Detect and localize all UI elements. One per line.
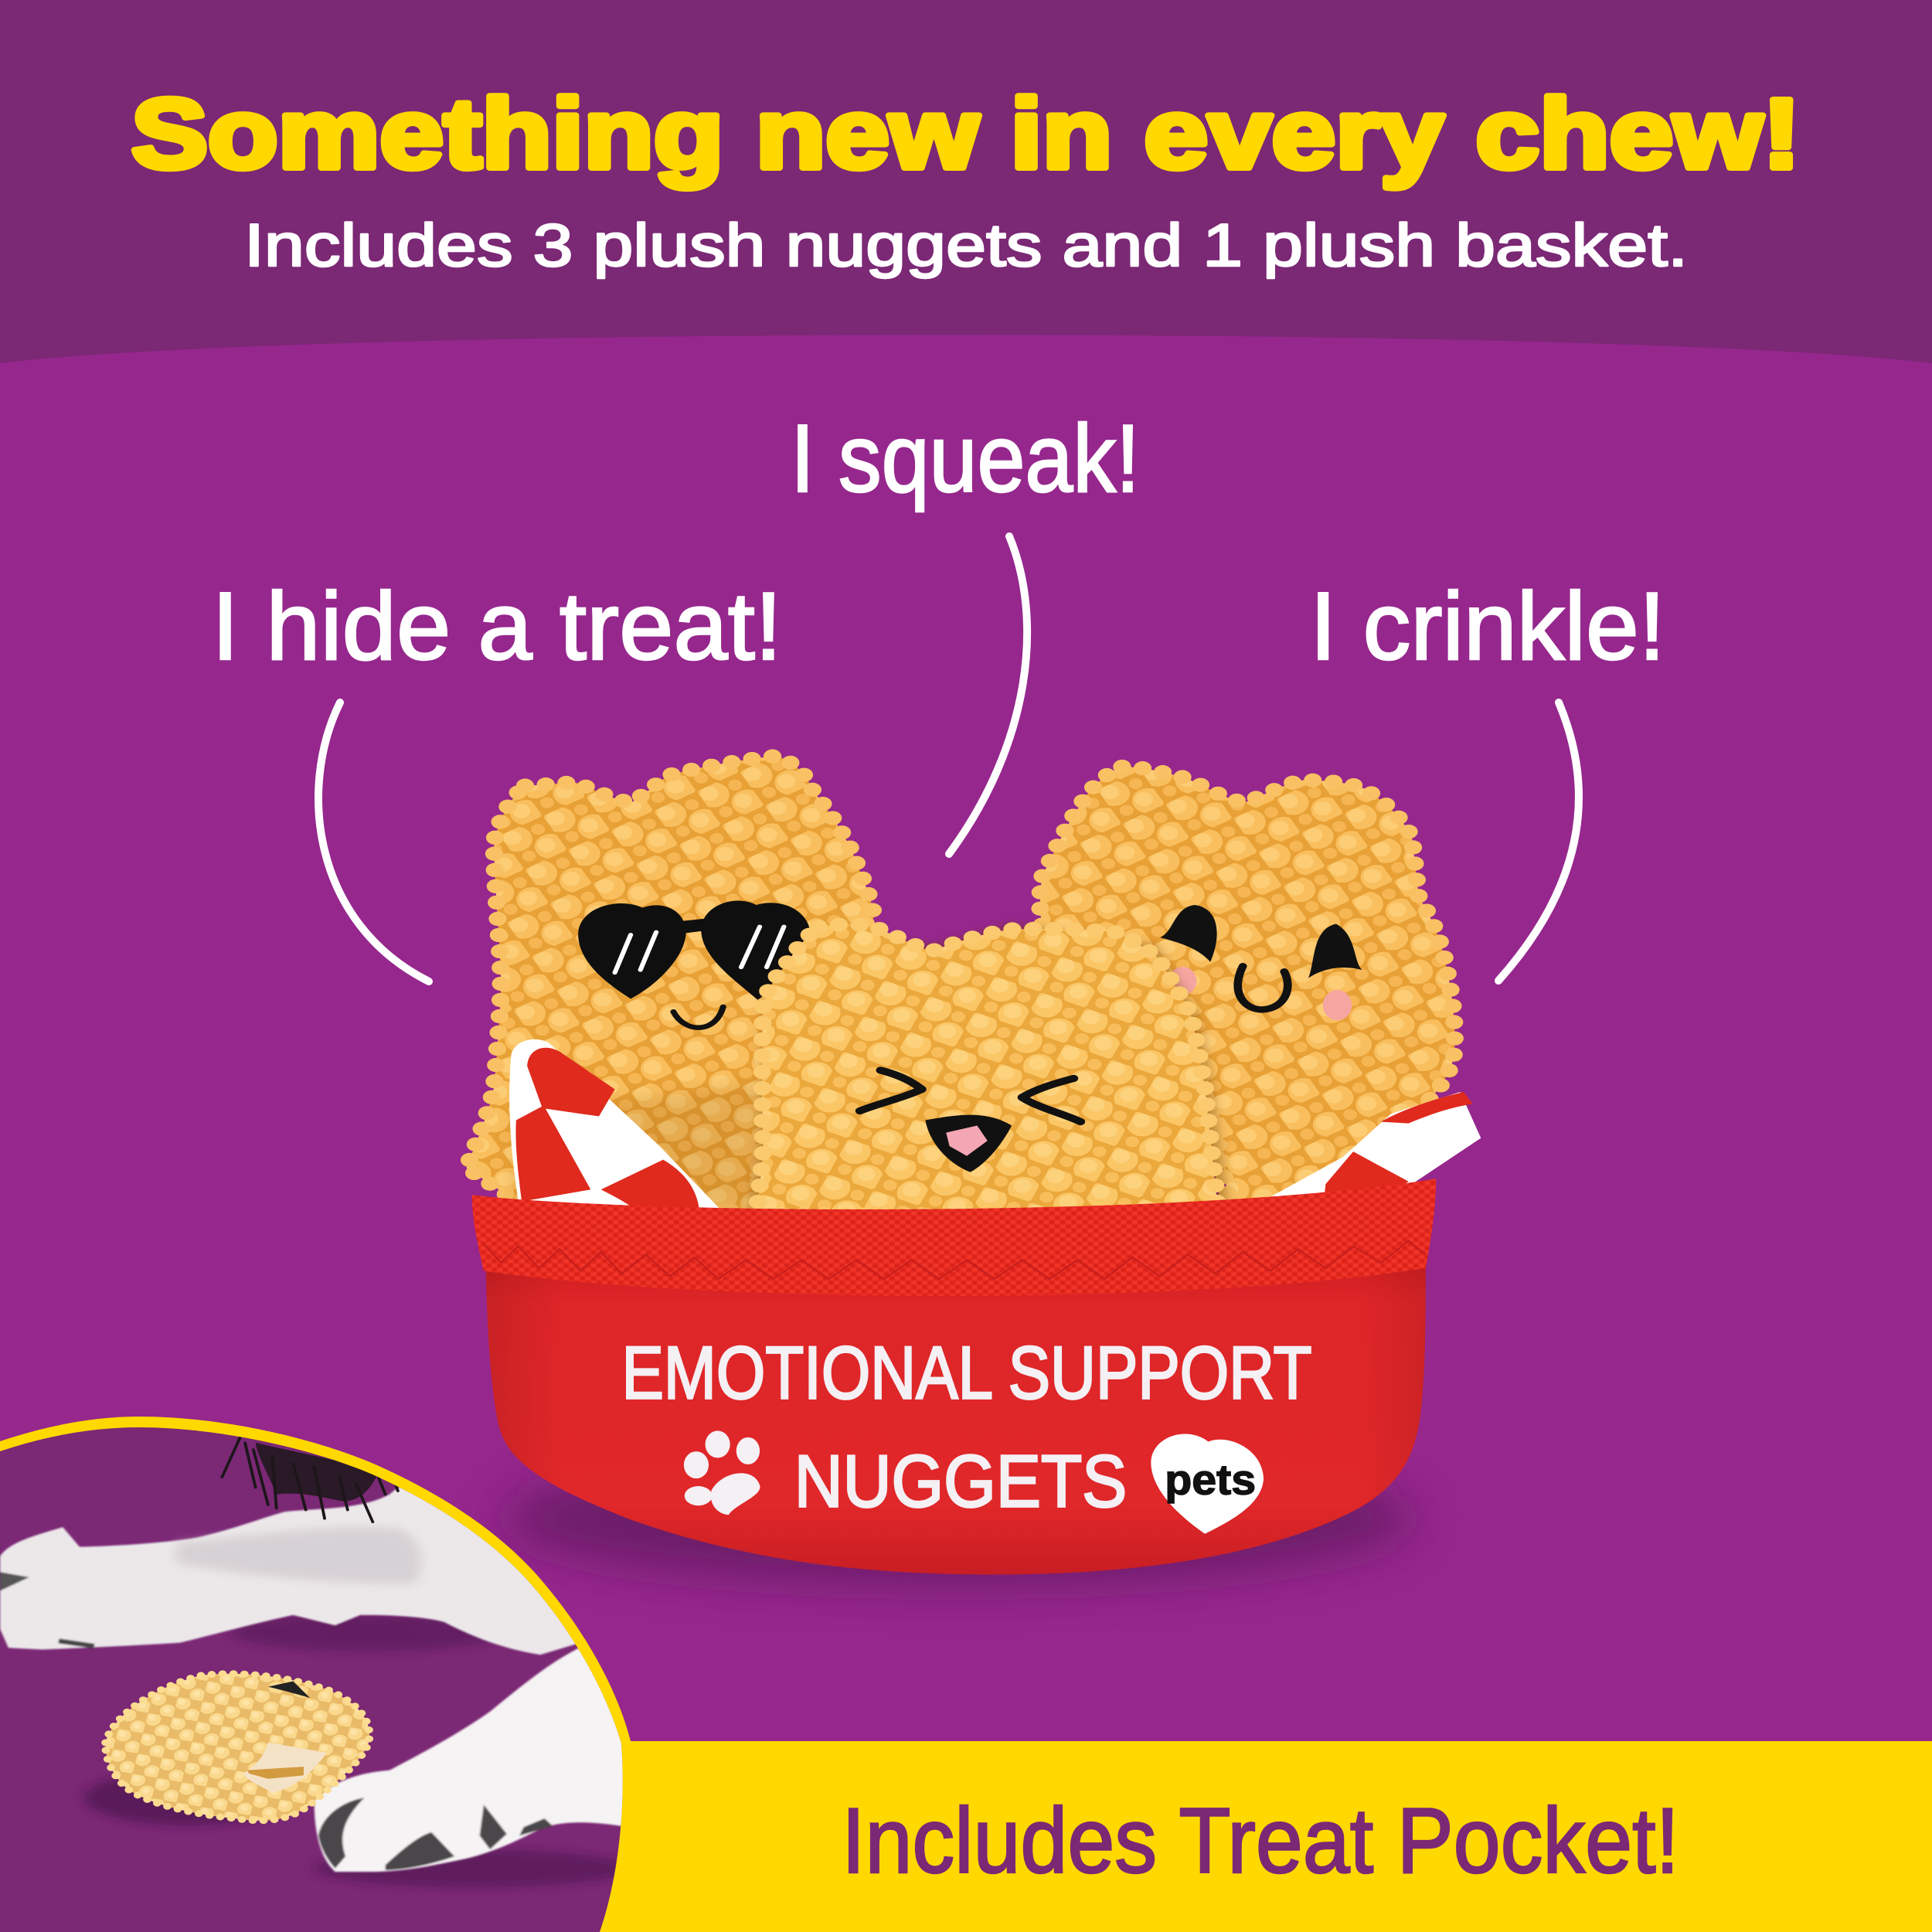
- icon: paw print: [684, 1430, 760, 1515]
- front nugget shadow: [750, 924, 1229, 1216]
- plush nugget with pocket: [105, 1674, 369, 1821]
- left napkin: [509, 1039, 723, 1213]
- arrow: right curve: [1498, 702, 1579, 981]
- callout: I hide a treat: I hide a treat!: [212, 573, 782, 680]
- front nugget: [757, 924, 1219, 1216]
- panel: inset photo: [0, 1414, 641, 1932]
- arrow: middle curve: [949, 536, 1027, 854]
- banner text: Includes Treat Pocket!: [842, 1789, 1679, 1893]
- embroidered label: emotional support: EMOTIONAL SUPPORT: [622, 1332, 1312, 1414]
- arrow: left curve: [318, 702, 429, 981]
- icon: pets heart logo: [1151, 1434, 1264, 1534]
- right nugget: [1040, 767, 1457, 1216]
- callout: I crinkle: I crinkle!: [1310, 573, 1665, 680]
- dog upper leg: [0, 1486, 587, 1655]
- basket shadow: [502, 1453, 1414, 1584]
- subtitle: Includes 3 plush nuggets and 1 plush basket.: [244, 211, 1688, 279]
- product: nuggets in basket: [467, 756, 1481, 1574]
- face: happy closed eyes: [860, 1070, 1080, 1122]
- face: wink eyes: [1160, 905, 1362, 978]
- dog lower leg: [314, 1645, 628, 1872]
- inset content: [0, 1414, 641, 1932]
- panel: treat pocket banner: [595, 1741, 1932, 1932]
- banner background: [595, 1741, 1932, 1932]
- face: heart sunglasses: [578, 901, 810, 1000]
- basket rim: [472, 1179, 1436, 1296]
- shadows: [81, 1776, 260, 1828]
- left nugget: [467, 756, 873, 1211]
- callout: I squeak: I squeak!: [791, 406, 1140, 512]
- title: Something new in every chew!: [131, 79, 1801, 189]
- basket: [472, 1179, 1436, 1574]
- header band: [0, 0, 1932, 363]
- embroidered label: nuggets: NUGGETS: [794, 1440, 1127, 1523]
- dog ear fur: [222, 1436, 398, 1522]
- right napkin: [1240, 1092, 1481, 1216]
- inset yellow border: [0, 1417, 632, 1932]
- basket body: [486, 1265, 1426, 1574]
- icon: pets heart logo: pets: [1165, 1457, 1256, 1504]
